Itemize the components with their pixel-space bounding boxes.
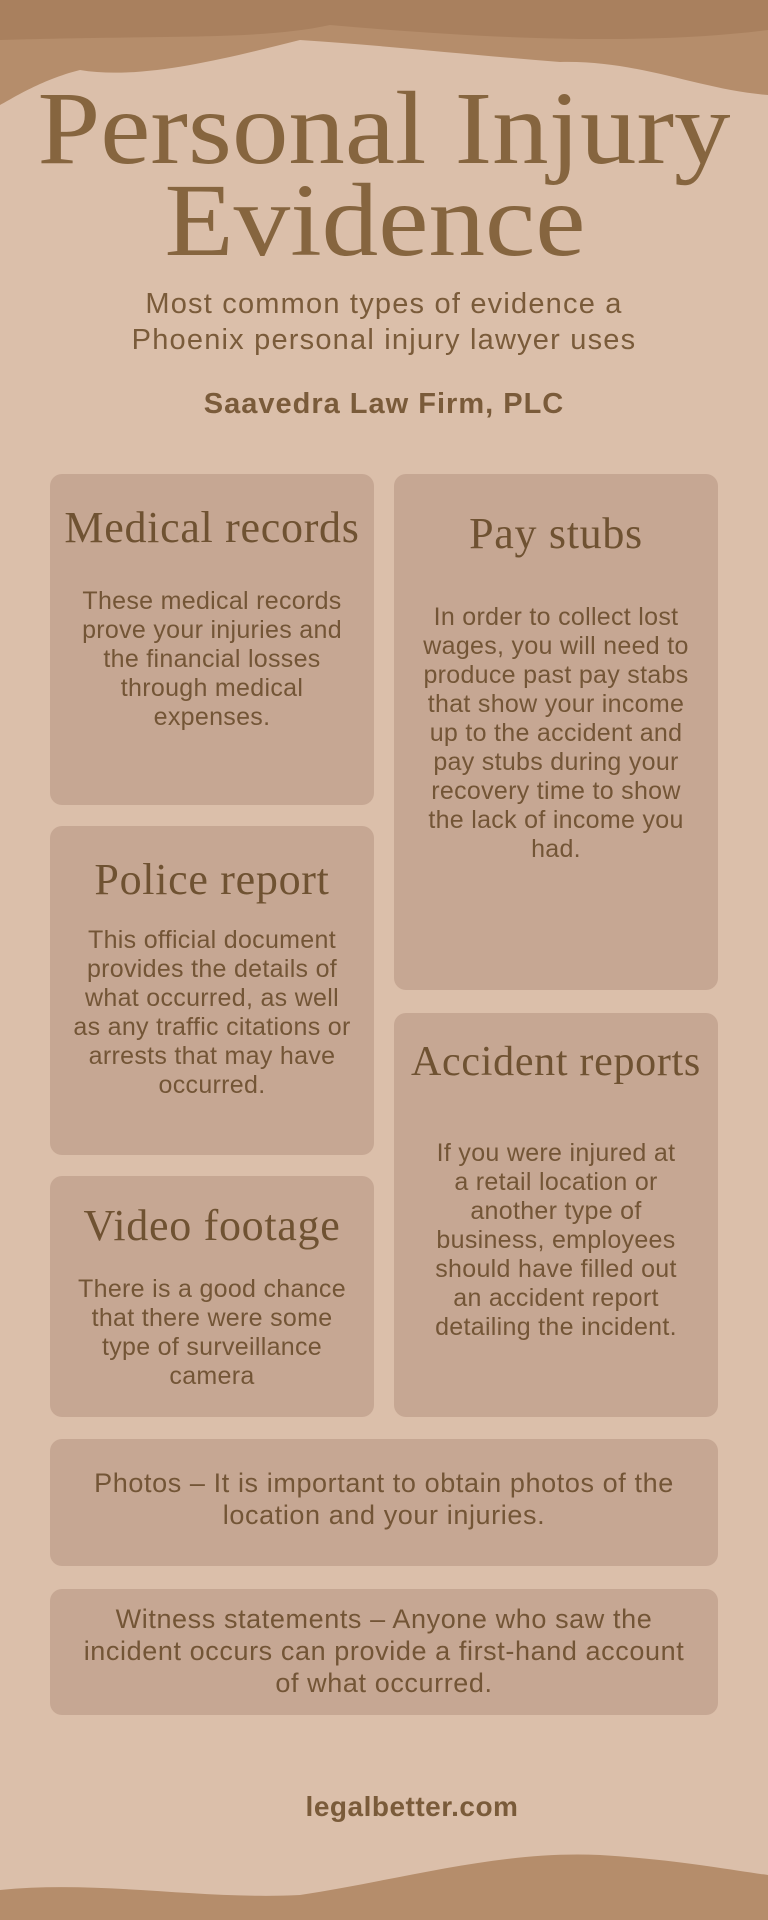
subtitle: Phoenix personal injury lawyer uses <box>132 324 636 356</box>
title <box>38 71 730 278</box>
panel: pay stubs: wages, you will need to <box>423 632 689 660</box>
panel: medical records: Medical records <box>64 503 360 552</box>
panel: video footage: There is a good chance <box>78 1275 346 1303</box>
panel: accident reports: detailing the incident. <box>435 1313 677 1341</box>
panel: video footage <box>50 1176 374 1417</box>
footer: legalbetter.com <box>306 1791 518 1822</box>
panel: accident reports <box>394 1013 718 1417</box>
panel: video footage: type of surveillance <box>102 1333 322 1361</box>
panel: pay stubs: up to the accident and <box>430 719 682 747</box>
panel: police report: Police report <box>94 855 330 904</box>
panel: accident reports: should have filled out <box>435 1255 677 1283</box>
panel: accident reports: business, employees <box>436 1226 676 1254</box>
torn paper bottom <box>0 1854 768 1920</box>
panel: medical records: through medical <box>121 674 303 702</box>
panel: police report: what occurred, as well <box>85 984 339 1012</box>
panel: pay stubs: produce past pay stabs <box>423 661 689 689</box>
panel: pay stubs: the lack of income you <box>428 806 684 834</box>
panel: accident reports: a retail location or <box>454 1168 658 1196</box>
panel: police report: occurred. <box>159 1071 265 1099</box>
firm name: Saavedra Law Firm, PLC <box>204 388 564 420</box>
panel: video footage: camera <box>169 1362 255 1390</box>
panel: police report: provides the details of <box>87 955 337 983</box>
panel: pay stubs: recovery time to show <box>431 777 681 805</box>
title: Personal Injury <box>38 71 730 186</box>
panel: video footage: that there were some <box>92 1304 332 1332</box>
panel: pay stubs <box>394 474 718 990</box>
panel: pay stubs: that show your income <box>428 690 684 718</box>
panel: pay stubs: had. <box>531 835 581 863</box>
panel: medical records: prove your injuries and <box>82 616 342 644</box>
panel: medical records <box>50 474 374 805</box>
panel: police report: arrests that may have <box>89 1042 335 1070</box>
panel: accident reports: an accident report <box>453 1284 659 1312</box>
panel: pay stubs: pay stubs during your <box>433 748 679 776</box>
panel: medical records: the financial losses <box>103 645 321 673</box>
panel: photos <box>50 1439 718 1566</box>
panel: police report <box>50 826 374 1155</box>
panel: photos: location and your injuries. <box>223 1500 545 1530</box>
subtitle: Most common types of evidence a <box>145 288 623 320</box>
panel: witness statements <box>50 1589 718 1715</box>
panel: police report: as any traffic citations or <box>73 1013 351 1041</box>
panel: photos: Photos – It is important to obtain photos of the <box>94 1468 674 1498</box>
panel: witness statements: of what occurred. <box>275 1668 493 1698</box>
panel: accident reports: If you were injured at <box>437 1139 675 1167</box>
title: Evidence <box>164 163 586 278</box>
panel: accident reports: Accident reports <box>411 1039 701 1085</box>
subtitle <box>132 288 636 356</box>
panel: police report: This official document <box>88 926 336 954</box>
panel: witness statements: Witness statements – Anyone who saw the <box>116 1604 652 1634</box>
panel: video footage: Video footage <box>84 1201 340 1250</box>
panel: accident reports: another type of <box>470 1197 642 1225</box>
panel: medical records: expenses. <box>154 703 270 731</box>
panel: medical records: These medical records <box>82 587 342 615</box>
panel: pay stubs: Pay stubs <box>469 509 643 558</box>
panel: pay stubs: In order to collect lost <box>434 603 678 631</box>
panel: witness statements: incident occurs can provide a first-hand account <box>84 1636 684 1666</box>
torn paper top <box>0 0 768 105</box>
